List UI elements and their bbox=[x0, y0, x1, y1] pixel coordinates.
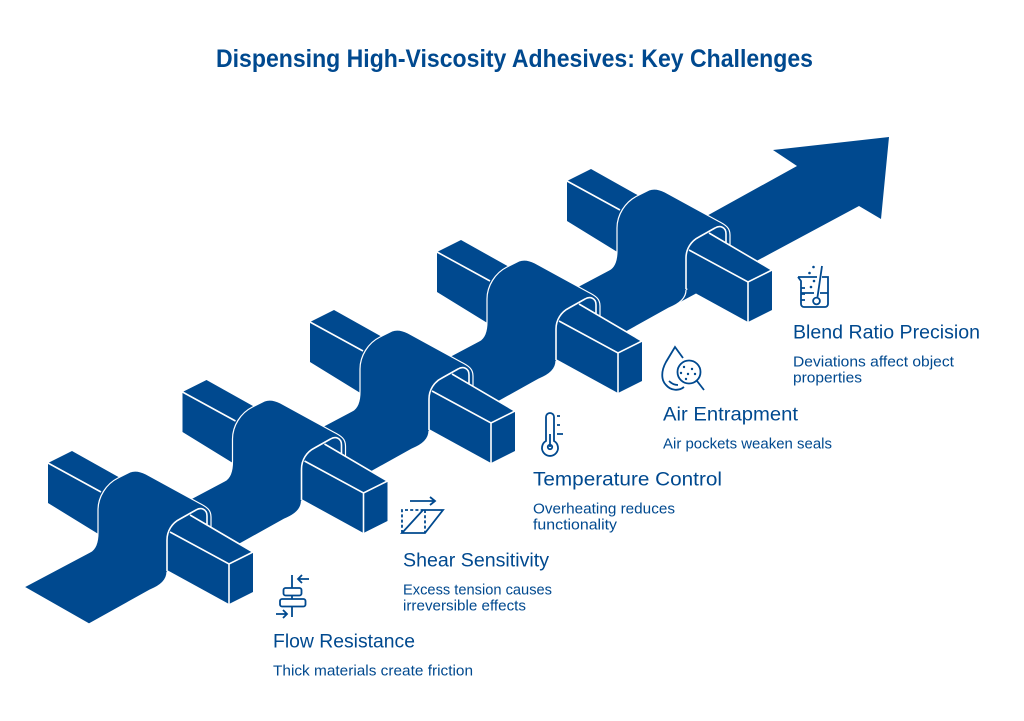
arrow diagram bbox=[24, 137, 889, 624]
text: flow resistance: Thick materials create friction bbox=[273, 664, 473, 680]
text: shear sensitivity bbox=[403, 550, 552, 614]
title: Dispensing High-Viscosity Adhesives: Key Challenges bbox=[216, 45, 813, 73]
arrowhead bbox=[609, 137, 889, 308]
text: temperature control: functionality bbox=[533, 518, 618, 534]
step 3 block bbox=[286, 310, 515, 483]
text: air entrapment: Air Entrapment bbox=[663, 404, 799, 426]
icon: flow resistance bbox=[276, 575, 309, 618]
text: shear sensitivity: Excess tension causes bbox=[403, 582, 552, 598]
text: blend ratio precision: Blend Ratio Precision bbox=[793, 322, 980, 344]
text: shear sensitivity: Shear Sensitivity bbox=[403, 550, 550, 572]
text: flow resistance: Flow Resistance bbox=[273, 632, 415, 652]
step 1 block bbox=[24, 451, 253, 624]
text: air entrapment bbox=[663, 404, 832, 452]
text: shear sensitivity: irreversible effects bbox=[403, 598, 526, 614]
icon: air entrapment bbox=[662, 347, 704, 390]
text: temperature control: Overheating reduces bbox=[533, 502, 675, 518]
step 4 block bbox=[413, 240, 642, 413]
step 5 block bbox=[543, 169, 772, 342]
text: blend ratio precision: Deviations affect object bbox=[793, 354, 954, 370]
icon: shear sensitivity bbox=[402, 497, 443, 533]
text: blend ratio precision: properties bbox=[793, 370, 862, 386]
icon: beaker bbox=[798, 266, 828, 307]
text: temperature control: Temperature Control bbox=[533, 470, 722, 490]
text: air entrapment: Air pockets weaken seals bbox=[663, 436, 832, 452]
step 2 block bbox=[158, 380, 388, 553]
icon: thermometer bbox=[542, 413, 563, 456]
text: flow resistance bbox=[273, 632, 473, 680]
text: blend ratio precision bbox=[793, 322, 980, 386]
text: temperature control bbox=[533, 470, 722, 534]
